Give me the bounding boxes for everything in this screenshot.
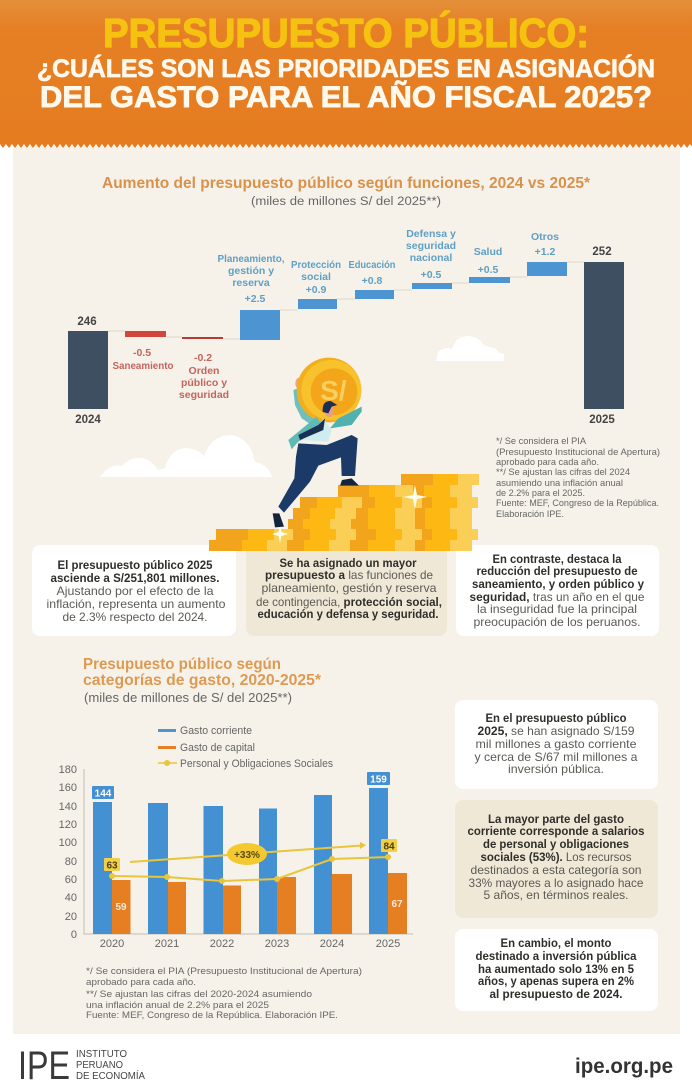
- bar 2025: [584, 246, 624, 426]
- icon: large cloud: [100, 435, 272, 477]
- footnote: waterfall: asumiendo una inflación anual: [496, 478, 623, 489]
- bar salud: +0.5: [478, 264, 499, 276]
- text box: mayor presupuesto: [246, 545, 447, 636]
- bar proteccion social: [291, 259, 341, 309]
- heading: categories chart: categorías de gasto, 2020-2025*: [83, 672, 322, 689]
- text box: inversion publica: al presupuesto de 2024.: [490, 987, 622, 1001]
- y axis: 40: [65, 892, 77, 904]
- text box: mayor presupuesto: presupuesto a las funciones de: [265, 568, 433, 582]
- bar defensa: nacional: [410, 252, 452, 264]
- text box: en contraste: reducción del presupuesto de: [476, 564, 638, 578]
- bar 2024: 2024: [75, 414, 101, 426]
- y axis: 100: [59, 837, 77, 849]
- text box: en contraste: seguridad, tras un año en el que: [470, 590, 645, 604]
- bar proteccion social: Protección: [291, 259, 341, 271]
- text box: salarios: 5 años, en términos reales.: [484, 888, 628, 902]
- text box: mayor presupuesto: de contingencia, protección social,: [256, 595, 442, 609]
- bar saneamiento: [112, 331, 174, 372]
- text box: salarios: destinados a esta categoría son: [470, 863, 642, 877]
- connector lines: [108, 262, 584, 339]
- y axis: 180: [59, 764, 77, 776]
- icon: small cloud: [436, 336, 504, 361]
- y axis: 160: [59, 782, 77, 794]
- bar salud: [469, 246, 510, 283]
- legend: [158, 725, 333, 770]
- text box: inversion publica: años, y apenas supera en 2%: [478, 974, 634, 988]
- icon: coin: [297, 358, 361, 422]
- bar orden publico: -0.2: [194, 352, 212, 364]
- heading: waterfall chart: (miles de millones S/ del 2025**): [251, 196, 441, 208]
- bar otros: +1.2: [535, 246, 556, 258]
- text box: mayor presupuesto: planeamiento, gestión y reserva: [262, 581, 437, 595]
- footnote: categories: Fuente: MEF, Congreso de la República. Elaboración IPE.: [86, 1010, 338, 1021]
- value labels: 84: [383, 842, 395, 852]
- text box: salarios: La mayor parte del gasto: [488, 812, 624, 826]
- footnote: waterfall: **/ Se ajustan las cifras del 2024: [496, 467, 630, 478]
- footnote: waterfall: (Presupuesto Institucional de Apertura): [496, 447, 660, 458]
- bar planeamiento: [218, 253, 285, 340]
- legend: gasto de capital: Gasto de capital: [180, 742, 255, 754]
- bar 2024: 246: [77, 316, 97, 328]
- text box: en contraste: saneamiento, y orden público y: [472, 577, 644, 591]
- footnote: categories: aprobado para cada año.: [86, 977, 196, 988]
- jacket: [288, 417, 323, 449]
- heading: waterfall chart: Aumento del presupuesto público según funciones, 2024 vs 2025*: [102, 175, 591, 192]
- panel: main content background: [13, 146, 680, 1034]
- text box: salarios: [455, 800, 658, 918]
- title: DEL GASTO PARA EL AÑO FISCAL 2025?: [40, 80, 652, 114]
- bar orden publico: seguridad: [179, 389, 229, 401]
- logo: IPE: PERUANO: [76, 1060, 123, 1071]
- header banner: [0, 0, 692, 148]
- bar planeamiento: +2.5: [245, 293, 266, 305]
- heading: categories chart: [83, 656, 322, 705]
- bar salud: Salud: [474, 246, 502, 258]
- footnote: categories: **/ Se ajustan las cifras del 2020-2024 asumiendo: [86, 989, 312, 1000]
- bar proteccion social: social: [301, 271, 331, 283]
- light bands: [267, 474, 479, 551]
- shirt: [302, 418, 332, 442]
- x axis labels: 2022: [210, 938, 234, 950]
- orange bars: [112, 873, 407, 934]
- y axis: 80: [65, 856, 77, 868]
- text box: salarios: corriente corresponde a salarios: [468, 824, 645, 838]
- x axis labels: 2021: [155, 938, 179, 950]
- bar saneamiento: -0.5: [133, 347, 151, 359]
- bar 2025: 2025: [589, 414, 615, 426]
- y axis: 60: [65, 874, 77, 886]
- title: PRESUPUESTO PÚBLICO:: [103, 10, 589, 56]
- bar 2024: [68, 316, 108, 426]
- footnote: categories: [86, 966, 362, 1021]
- back arm: [293, 387, 323, 428]
- text box: presupuesto 2025 gasto corriente: y cerca de S/67 mil millones a: [474, 750, 638, 764]
- heading: categories chart: (miles de millones de S/ del 2025**): [84, 691, 292, 705]
- bar otros: Otros: [531, 231, 559, 243]
- text box: salarios: sociales (53%). Los recursos: [480, 850, 632, 864]
- footnote: waterfall: aprobado para cada año.: [496, 457, 599, 468]
- bar 2025: 252: [592, 246, 612, 258]
- bar defensa: seguridad: [406, 240, 456, 252]
- bar educacion: Educación: [348, 259, 396, 271]
- bar defensa: Defensa y: [406, 228, 456, 240]
- trousers: [278, 435, 358, 513]
- icon: coin: S/: [320, 375, 347, 406]
- y axis: 0: [71, 929, 77, 941]
- bar planeamiento: reserva: [232, 277, 270, 289]
- tie: [298, 418, 325, 440]
- bar saneamiento: Saneamiento: [112, 360, 174, 372]
- text box: inversion publica: ha aumentado solo 13% en 5: [478, 962, 634, 976]
- waterfall chart: [68, 228, 624, 426]
- bar defensa: [406, 228, 456, 289]
- x axis labels: 2024: [320, 938, 344, 950]
- trend arrow +33%: +33%: [234, 850, 260, 861]
- text box: inversion publica: [455, 929, 658, 1011]
- illustration: man carrying coin: [273, 358, 362, 527]
- icon: sparkles: [272, 485, 427, 543]
- hand: [295, 378, 303, 389]
- blue bars: [93, 788, 388, 934]
- shoes: [273, 478, 359, 527]
- bar educacion: [348, 259, 396, 299]
- y axis: 120: [59, 819, 77, 831]
- bar orden publico: público y: [181, 377, 227, 389]
- bar educacion: +0.8: [362, 275, 383, 287]
- text box: en contraste: preocupación de los peruanos.: [474, 615, 640, 629]
- value labels: 63: [106, 860, 118, 872]
- head: [323, 401, 337, 417]
- x axis labels: 2020: [100, 938, 124, 950]
- value labels: [92, 772, 403, 913]
- text box: presupuesto 2025 gasto corriente: En el presupuesto público: [486, 711, 626, 725]
- text box: mayor presupuesto: Se ha asignado un mayor: [280, 556, 417, 570]
- footnote: waterfall: */ Se considera el PIA: [496, 436, 587, 447]
- legend: gasto corriente: Gasto corriente: [180, 725, 252, 737]
- website url: ipe.org.pe: [575, 1055, 673, 1078]
- y axis: 140: [59, 801, 77, 813]
- text box: presupuesto 2025 gasto corriente: inversión pública.: [508, 762, 604, 776]
- logo: IPE: INSTITUTO: [76, 1049, 127, 1060]
- footnote: waterfall: [496, 436, 660, 520]
- text box: presupuesto 2025: El presupuesto público 2025: [58, 558, 213, 572]
- x axis labels: [100, 938, 400, 950]
- y axis: 20: [65, 911, 77, 923]
- text box: presupuesto 2025: asciende a S/251,801 millones.: [50, 571, 220, 585]
- footnote: waterfall: Fuente: MEF, Congreso de la República.: [496, 498, 659, 509]
- footnote: waterfall: de 2.2% para el 2025.: [496, 488, 585, 499]
- text box: presupuesto 2025: [32, 545, 236, 636]
- right arm: [330, 407, 362, 428]
- value labels: 159: [370, 774, 387, 786]
- value labels: 67: [391, 899, 403, 910]
- text box: presupuesto 2025: inflación, representa un aumento: [46, 597, 226, 611]
- text box: inversion publica: destinado a inversión pública: [476, 949, 637, 963]
- bar orden publico: Orden: [189, 365, 219, 377]
- footnote: categories: una inflación anual de 2.2% para el 2025: [86, 1000, 269, 1011]
- footnote: categories: */ Se considera el PIA (Presupuesto Institucional de Apertura): [86, 966, 362, 977]
- line series: personal: [109, 854, 391, 884]
- text box: presupuesto 2025: Ajustando por el efecto de la: [56, 584, 214, 598]
- text box: en contraste: En contraste, destaca la: [492, 552, 622, 566]
- text box: inversion publica: En cambio, el monto: [500, 936, 612, 950]
- text box: presupuesto 2025 gasto corriente: mil millones a gasto corriente: [476, 737, 637, 751]
- y axis: [59, 764, 413, 941]
- heading: categories chart: Presupuesto público según: [83, 656, 281, 673]
- text box: salarios: de personal y obligaciones: [483, 837, 629, 851]
- bar defensa: +0.5: [421, 269, 442, 281]
- text box: mayor presupuesto: educación y defensa y seguridad.: [258, 607, 438, 621]
- text box: presupuesto 2025 gasto corriente: 2025, se han asignado S/159: [478, 724, 635, 738]
- bar proteccion social: +0.9: [306, 284, 327, 296]
- x axis labels: 2023: [265, 938, 289, 950]
- title: [37, 10, 655, 114]
- illustration: coin stacks: [209, 474, 479, 551]
- text box: en contraste: [456, 545, 659, 636]
- title: ¿CUÁLES SON LAS PRIORIDADES EN ASIGNACIÓN: [37, 53, 655, 83]
- bar orden publico: [179, 337, 229, 401]
- text box: presupuesto 2025 gasto corriente: [455, 700, 658, 789]
- text box: salarios: 33% mayores a lo asignado hace: [468, 876, 644, 890]
- bar otros: [527, 231, 567, 276]
- value labels: 59: [115, 902, 127, 913]
- text box: en contraste: la inseguridad fue la principal: [477, 602, 637, 616]
- x axis labels: 2025: [376, 938, 400, 950]
- text box: presupuesto 2025: de 2.3% respecto del 2024.: [62, 610, 208, 624]
- mid tone bands: [242, 474, 458, 551]
- logo: IPE: [18, 1044, 145, 1080]
- bar chart: gasto por categorias: [59, 764, 413, 950]
- bar planeamiento: Planeamiento,: [218, 253, 285, 265]
- value labels: 144: [95, 788, 112, 800]
- legend: personal: Personal y Obligaciones Sociales: [180, 758, 333, 770]
- footnote: waterfall: Elaboración IPE.: [496, 509, 564, 520]
- trend arrow +33%: [130, 842, 366, 865]
- stack base: [209, 474, 479, 551]
- heading: waterfall chart: [102, 175, 591, 208]
- bar planeamiento: gestión y: [228, 265, 274, 277]
